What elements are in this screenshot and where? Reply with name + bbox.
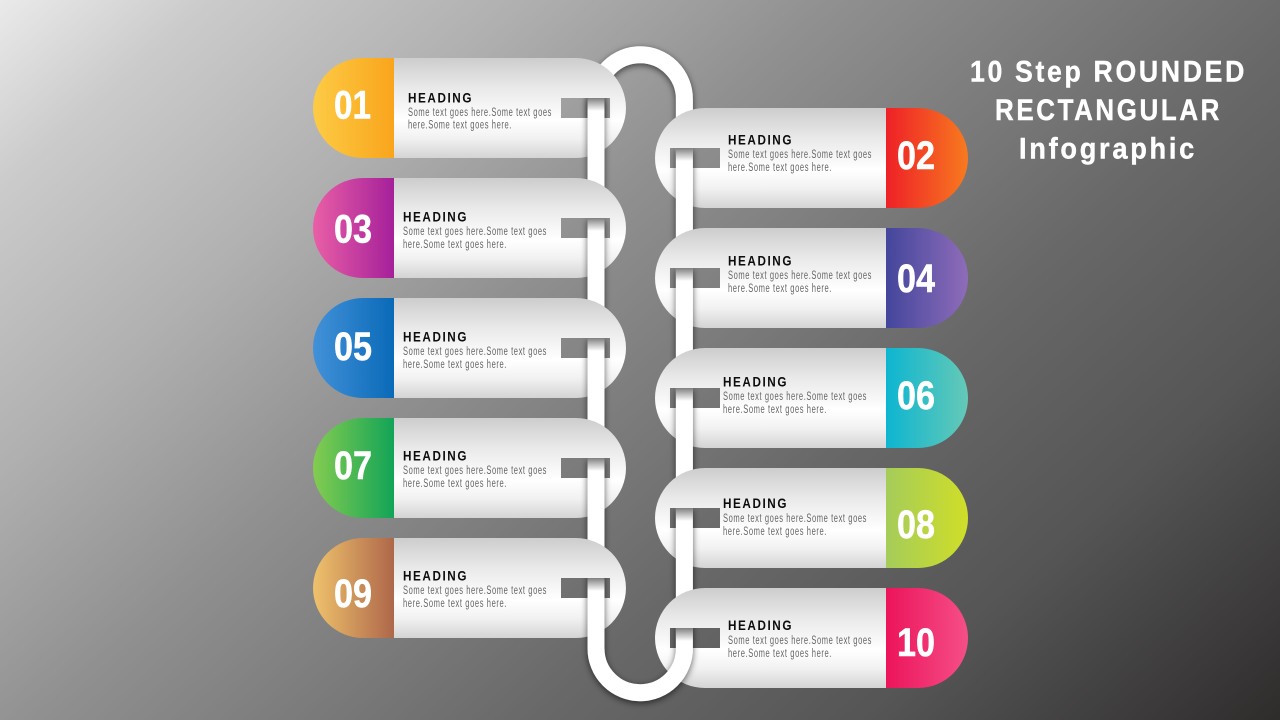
- pill 08: Some text goes here.Some text goes: [723, 513, 867, 525]
- pill 03: here.Some text goes here.: [403, 239, 507, 251]
- title: RECTANGULAR: [995, 94, 1222, 127]
- pill 05: HEADING: [403, 330, 468, 344]
- connector band through pill 04: [676, 268, 693, 360]
- pill 10: 10: [897, 621, 935, 665]
- pill 09: HEADING: [403, 568, 468, 584]
- pill 07: HEADING: [403, 448, 468, 464]
- pill 09: here.Some text goes here.: [403, 598, 507, 610]
- pill 08: 08: [897, 503, 935, 547]
- pill 02: here.Some text goes here.: [728, 162, 832, 174]
- pill 02: [655, 108, 968, 208]
- pill 01: Some text goes here.Some text goes: [408, 107, 552, 119]
- pill 08: [655, 468, 968, 568]
- pill 04: here.Some text goes here.: [728, 283, 832, 295]
- pill 04: 04: [897, 257, 936, 301]
- pill 02: 02: [897, 134, 935, 178]
- pill 01: HEADING: [408, 90, 473, 105]
- pill 01: 01: [334, 84, 371, 128]
- pill 06: 06: [897, 374, 935, 418]
- pill 09: 09: [334, 572, 372, 616]
- connector band through pill 07: [588, 458, 604, 550]
- pill 07: [313, 418, 626, 518]
- pill 01: here.Some text goes here.: [408, 120, 512, 132]
- pill 05: Some text goes here.Some text goes: [403, 346, 547, 358]
- pill 09: [313, 538, 626, 638]
- title: Infographic: [1019, 132, 1197, 166]
- pill 04: [655, 228, 968, 328]
- pill 07: 07: [334, 444, 372, 488]
- pill 05: here.Some text goes here.: [403, 359, 507, 371]
- pill 03: 03: [334, 208, 372, 252]
- pill 03: HEADING: [403, 210, 468, 224]
- pill 10: HEADING: [728, 618, 793, 633]
- pill 05: 05: [334, 325, 372, 369]
- pill 06: here.Some text goes here.: [723, 404, 827, 416]
- pill 05: [313, 298, 626, 398]
- pill 02: HEADING: [728, 132, 793, 147]
- connector band through pill 05: [588, 338, 604, 430]
- pill 03: [313, 178, 626, 278]
- pill 07: Some text goes here.Some text goes: [403, 465, 547, 477]
- pill 03: Some text goes here.Some text goes: [403, 226, 547, 238]
- pill 10: here.Some text goes here.: [728, 648, 832, 660]
- pill 10: [655, 588, 968, 688]
- pill 06: Some text goes here.Some text goes: [723, 391, 867, 403]
- pill 04: HEADING: [728, 253, 793, 268]
- pill 01: [313, 58, 626, 158]
- connector band through pill 01: [588, 98, 604, 190]
- pill 07: here.Some text goes here.: [403, 478, 507, 490]
- pill 06: HEADING: [723, 374, 788, 389]
- connector arc: bottom U loop: [588, 570, 693, 693]
- connector band through pill 03: [588, 218, 604, 310]
- pill 06: [655, 348, 968, 448]
- pill 10: Some text goes here.Some text goes: [728, 635, 872, 647]
- pill 04: Some text goes here.Some text goes: [728, 270, 872, 282]
- connector band through pill 02: [676, 148, 693, 240]
- title: [970, 56, 1247, 166]
- pill 08: here.Some text goes here.: [723, 526, 827, 538]
- pill 08: HEADING: [723, 496, 788, 511]
- title: 10 Step ROUNDED: [970, 56, 1247, 88]
- pill 02: Some text goes here.Some text goes: [728, 149, 872, 161]
- connector arc: top loop: [596, 55, 684, 130]
- connector band through pill 08: [676, 508, 693, 600]
- connector band through pill 06: [676, 388, 693, 480]
- pill 09: Some text goes here.Some text goes: [403, 585, 547, 597]
